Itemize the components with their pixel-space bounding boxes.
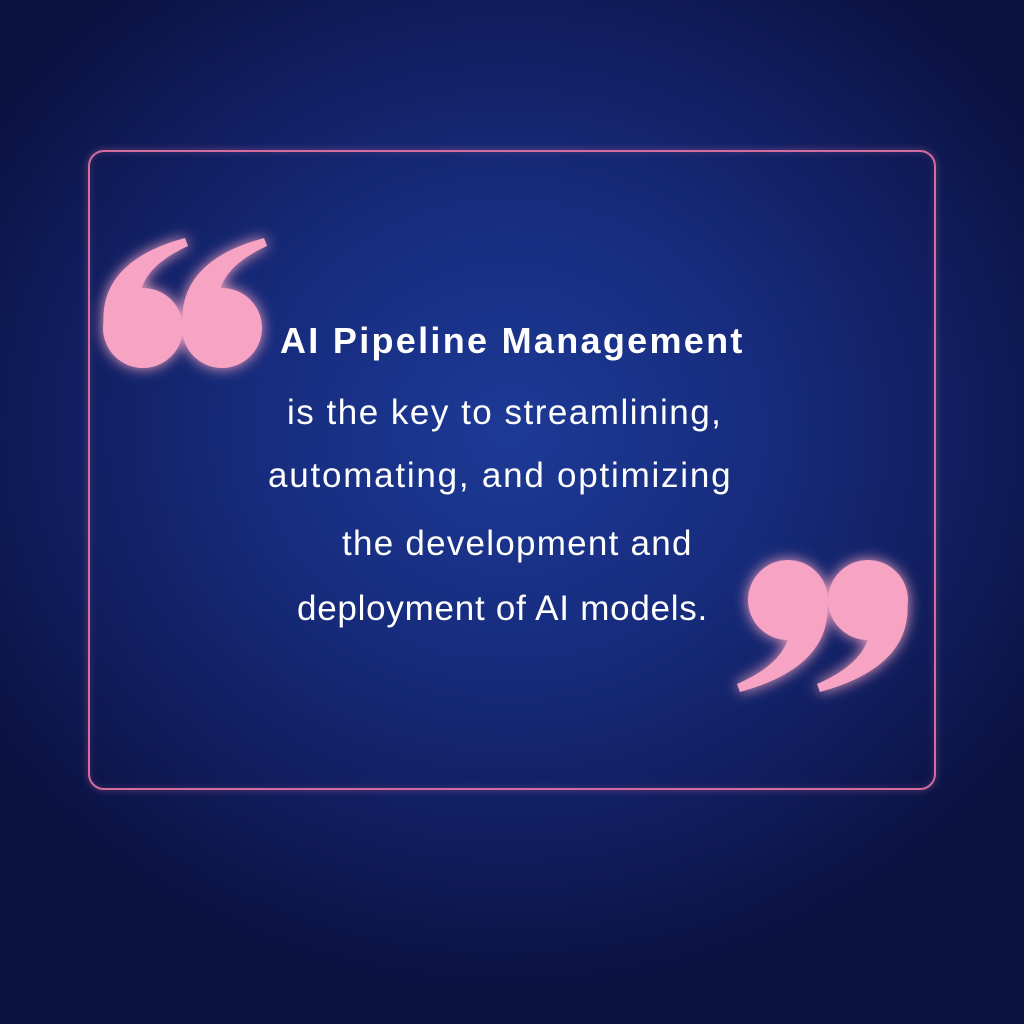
text line 3: automating, and optimizing (268, 456, 732, 495)
text line 5: deployment of AI models. (297, 589, 708, 628)
text line 2: is the key to streamlining, (287, 393, 722, 432)
text block: quote (268, 320, 745, 628)
text line 4: the development and (342, 524, 693, 563)
panel: quote frame (88, 150, 936, 790)
heading line: AI Pipeline Management (280, 320, 745, 361)
